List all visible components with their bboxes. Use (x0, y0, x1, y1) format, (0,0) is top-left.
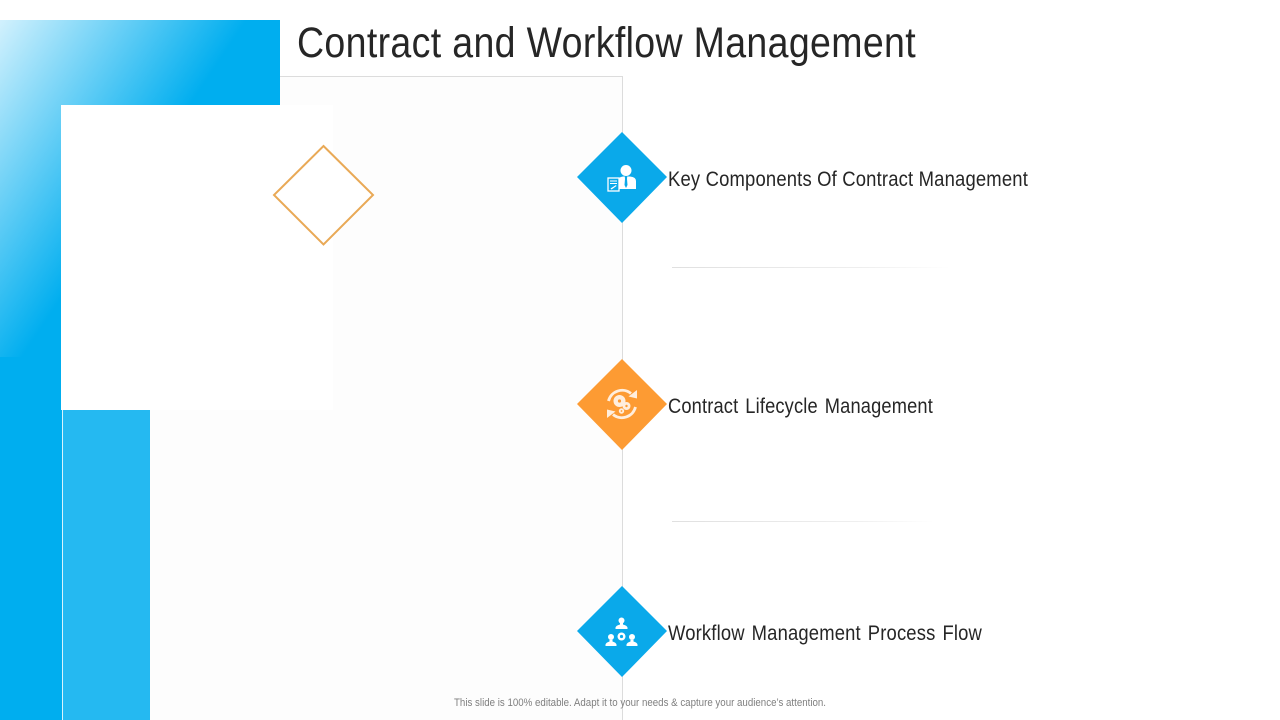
divider 1 (672, 267, 950, 268)
panel: pale background (150, 76, 622, 720)
item 1: key components (577, 132, 1028, 223)
panel top border and central timeline (280, 76, 622, 720)
label: contract lifecycle: Contract Lifecycle Management (668, 394, 933, 418)
diamond: workflow management (577, 586, 667, 677)
light blue column (61, 410, 150, 720)
icon: person with document (608, 165, 636, 191)
icon: gears with cycle arrows (607, 390, 637, 418)
footer note: This slide is 100% editable. Adapt it to your needs & capture your audience’s attention. (454, 697, 826, 709)
orange outline diamond (274, 146, 373, 244)
label: workflow management: Workflow Management Process Flow (668, 621, 982, 645)
white image panel (61, 105, 333, 410)
diamond: contract lifecycle (577, 359, 667, 450)
icon: three people and a gear (606, 618, 638, 646)
divider 2 (672, 521, 934, 522)
label: key components: Key Components Of Contract Management (668, 167, 1028, 191)
blue corner frame (0, 20, 280, 720)
item 2: contract lifecycle (577, 359, 933, 450)
item 3: workflow management (577, 586, 982, 677)
title: Contract and Workflow Management (297, 19, 916, 67)
diamond: key components (577, 132, 667, 223)
